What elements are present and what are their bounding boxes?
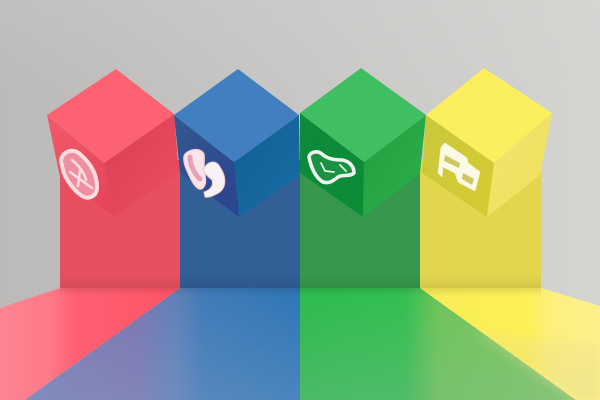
icon: key-shaped outline xyxy=(309,152,354,183)
wall color stripes below the cubes xyxy=(60,160,541,288)
cube: red xyxy=(47,69,179,217)
cube: yellow xyxy=(422,68,552,217)
icon: lock outline xyxy=(61,151,97,198)
icon: curled arrows xyxy=(184,150,225,197)
cube: green xyxy=(300,68,426,217)
floor color panels xyxy=(0,288,600,400)
icon: letter-like block outline xyxy=(438,143,480,191)
cube: blue xyxy=(174,69,300,217)
